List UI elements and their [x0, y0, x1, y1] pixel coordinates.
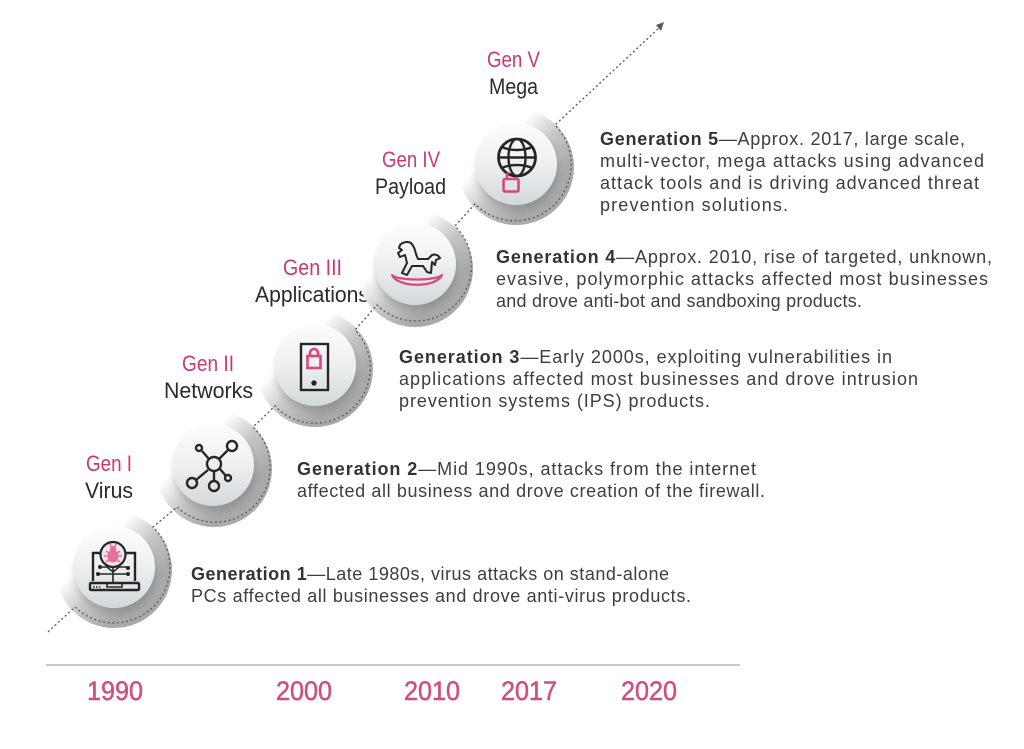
label: Gen III Applications [255, 255, 369, 307]
text: generation 3 description [399, 347, 918, 411]
label: Gen V Mega [487, 47, 540, 99]
text: generation 3 description: Generation 3—Early 2000s, exploiting vulnerabilities in [399, 347, 892, 367]
year labels: 1990 [87, 676, 143, 706]
text: generation 5 description: prevention solutions. [600, 195, 788, 215]
label: Gen I Virus: Gen I [86, 451, 132, 476]
label: Gen V Mega: Mega [489, 74, 539, 99]
label: Gen III Applications: Applications [255, 282, 369, 307]
label: Gen I Virus [85, 451, 133, 503]
text: generation 5 description [600, 129, 984, 215]
node: generation 3 [255, 255, 918, 427]
text: generation 5 description: multi-vector, mega attacks using advanced [600, 151, 984, 171]
label: Gen IV Payload: Payload [375, 174, 446, 199]
label: Gen I Virus: Virus [85, 478, 133, 503]
text: generation 4 description [496, 247, 992, 311]
text: generation 1 description: Generation 1—Late 1980s, virus attacks on stand-alone [191, 564, 669, 584]
text: generation 4 description: and drove anti-bot and sandboxing products. [496, 291, 862, 311]
label: Gen II Networks: Networks [164, 378, 253, 403]
text: generation 5 description: Generation 5—Approx. 2017, large scale, [600, 129, 965, 149]
arrow: dotted growth line [48, 22, 664, 632]
text: generation 5 description: attack tools and is driving advanced threat [600, 173, 979, 193]
text: generation 1 description [191, 564, 691, 606]
year labels: 2000 [276, 676, 332, 706]
icon: rocking horse [392, 242, 442, 285]
timeline axis [46, 665, 740, 706]
icon: phone with lock [301, 344, 328, 390]
label: Gen IV Payload: Gen IV [382, 147, 440, 172]
text: generation 4 description: Generation 4—Approx. 2010, rise of targeted, unknown, [496, 247, 992, 267]
label: Gen III Applications: Gen III [283, 255, 342, 280]
node: generation 1 [56, 451, 691, 628]
node: generation 5 [458, 47, 984, 225]
icon: network [187, 441, 237, 491]
year labels: 2010 [404, 676, 460, 706]
label: Gen II Networks [164, 351, 253, 403]
text: generation 1 description: PCs affected all businesses and drove anti-virus products. [191, 586, 691, 606]
text: generation 2 description [297, 459, 765, 501]
label: Gen IV Payload [375, 147, 446, 199]
text: generation 2 description: Generation 2—Mid 1990s, attacks from the internet [297, 459, 756, 479]
icon: laptop with bug [90, 542, 139, 590]
year labels: 2017 [501, 676, 557, 706]
year labels [87, 676, 677, 706]
label: Gen II Networks: Gen II [182, 351, 234, 376]
label: Gen V Mega: Gen V [487, 47, 540, 72]
text: generation 3 description: prevention systems (IPS) products. [399, 391, 710, 411]
icon: globe with lock [498, 139, 536, 192]
year labels: 2020 [621, 676, 677, 706]
text: generation 2 description: affected all business and drove creation of the firewall. [297, 481, 765, 501]
text: generation 3 description: applications affected most businesses and drove intrusion [399, 369, 918, 389]
node: generation 2 [156, 351, 765, 527]
node: generation 4 [357, 147, 992, 327]
text: generation 4 description: evasive, polymorphic attacks affected most businesses [496, 269, 988, 289]
